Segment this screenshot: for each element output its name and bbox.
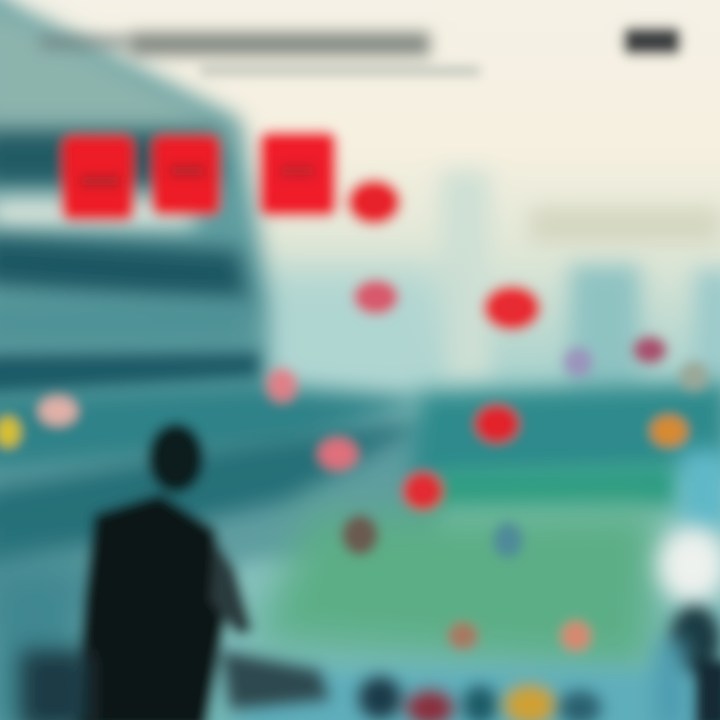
distant city skyline xyxy=(250,170,720,400)
silhouette of person xyxy=(20,424,330,720)
left stadium stands xyxy=(0,0,440,640)
top right logo xyxy=(624,28,680,54)
bottom foreground xyxy=(0,527,720,720)
red and coloured markers xyxy=(0,280,709,651)
red headline blobs xyxy=(62,132,400,224)
lower stands band xyxy=(410,382,720,530)
title block, illegible dark blur xyxy=(40,32,480,76)
green pitch xyxy=(255,505,660,670)
